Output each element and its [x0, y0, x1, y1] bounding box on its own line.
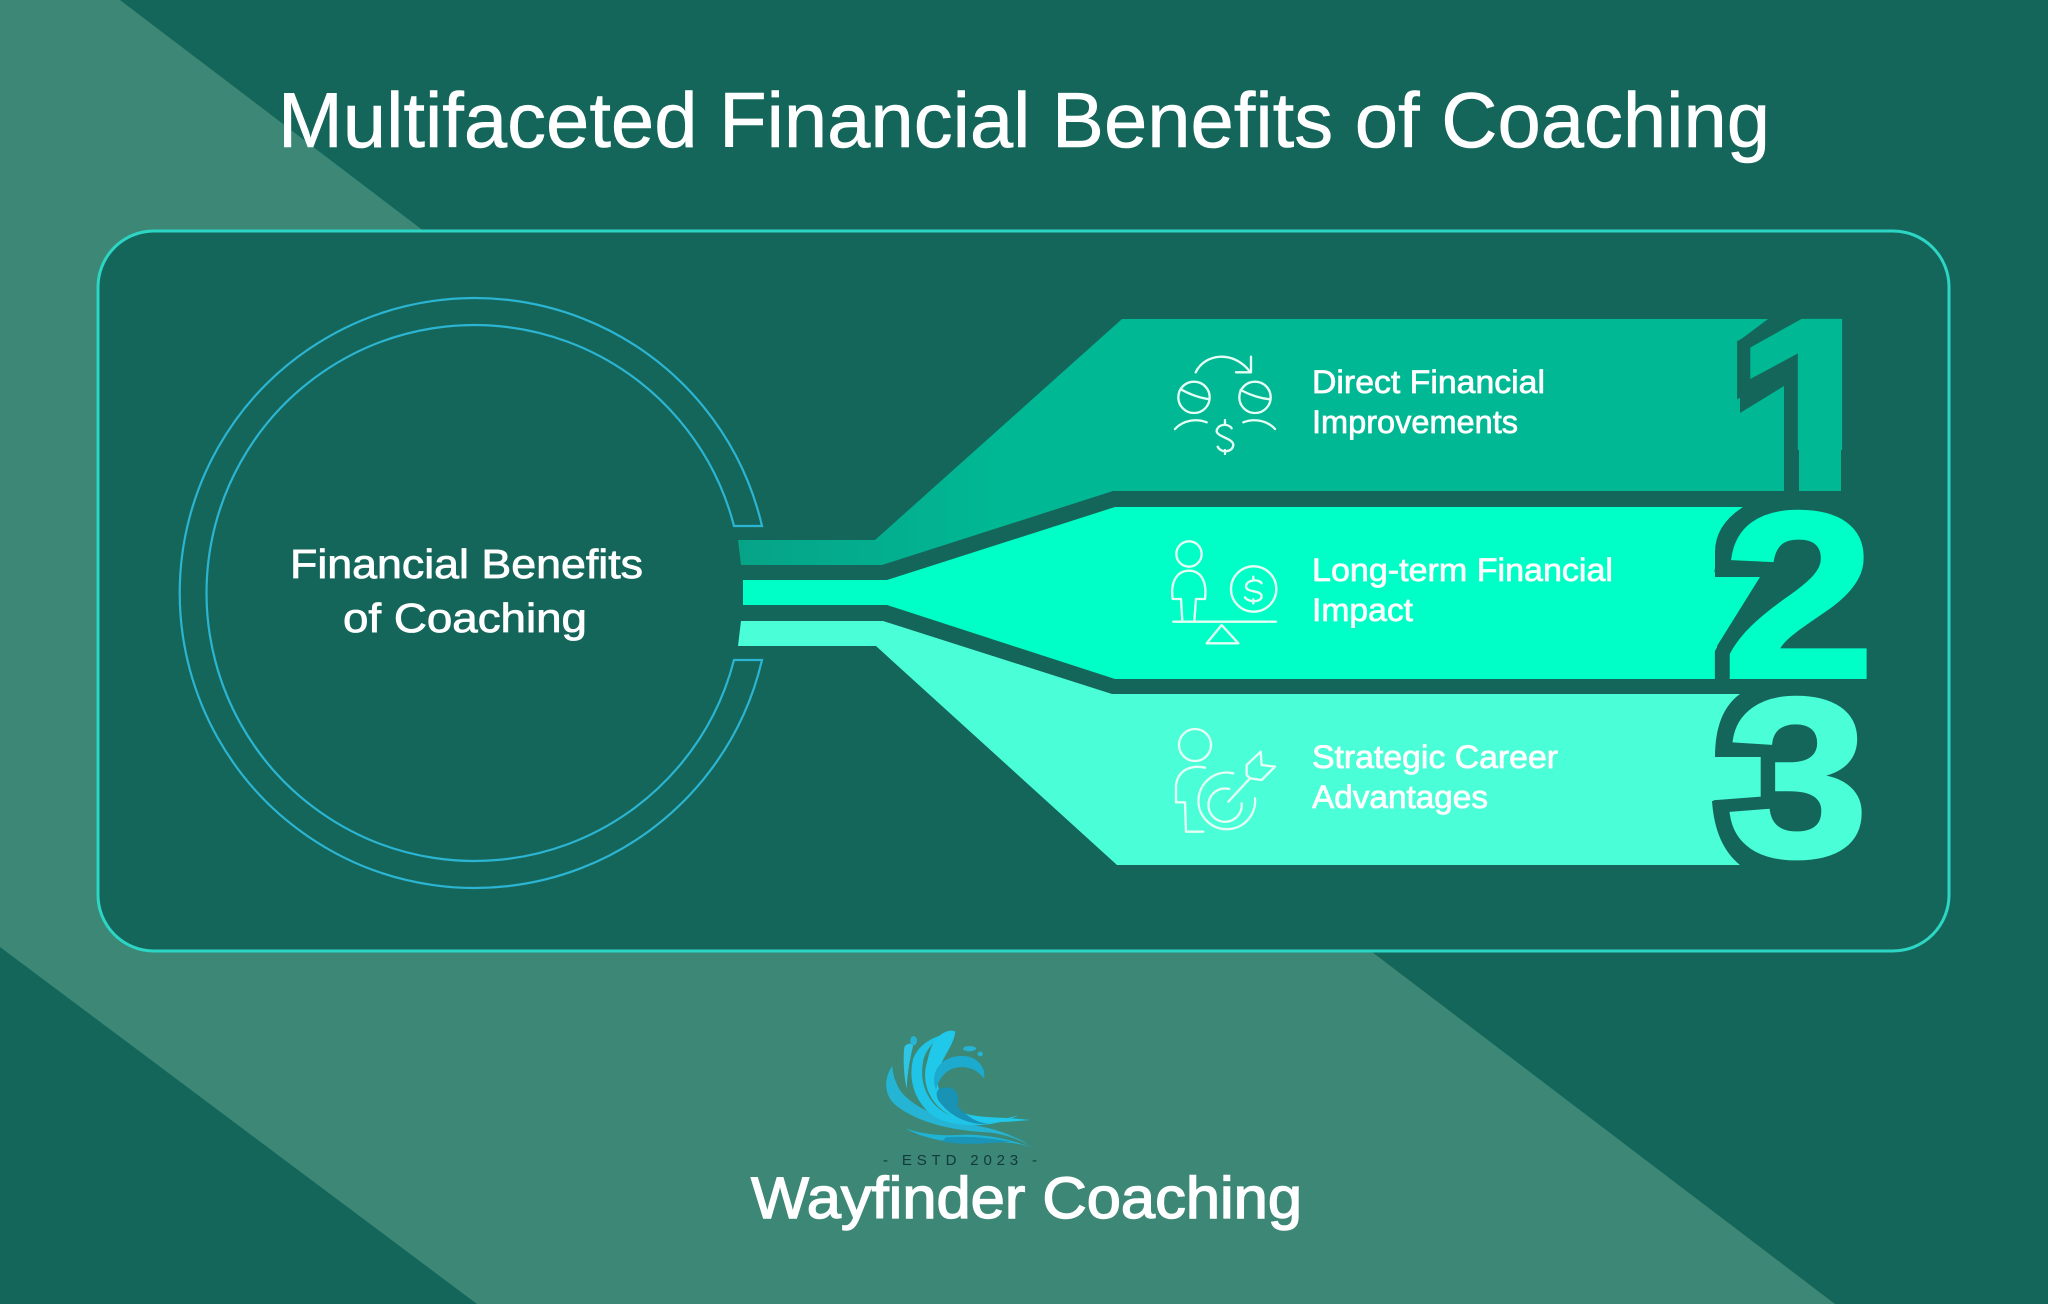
number 3: 3 — [1726, 652, 1869, 905]
label 3: Strategic Career — [1312, 739, 1558, 775]
label 2: Long-term Financial — [1312, 552, 1613, 588]
title: Multifaceted Financial Benefits of Coaching — [278, 76, 1770, 164]
circle label — [290, 541, 643, 641]
panel: main container — [98, 231, 1949, 951]
number 1 — [1737, 318, 1842, 491]
label 3 — [1312, 739, 1558, 815]
band 2: long-term financial impact — [743, 464, 1875, 728]
number 2: 2 — [1722, 464, 1875, 728]
number 1: 1 — [1733, 267, 1893, 544]
brand name: Wayfinder Coaching — [751, 1166, 1302, 1231]
circle ring — [180, 298, 762, 888]
band 3: strategic career advantages — [738, 621, 1869, 905]
label 1: Improvements — [1312, 404, 1518, 440]
icon: person with target — [1176, 729, 1275, 832]
label 2: Impact — [1312, 592, 1413, 628]
logo: wave — [886, 1031, 1035, 1149]
icon: people exchanging money — [1175, 357, 1275, 454]
label 2 — [1312, 552, 1613, 628]
band 1: direct financial improvements — [738, 318, 1842, 565]
label 3: Advantages — [1312, 779, 1488, 815]
number 1: 1 — [1733, 267, 1893, 544]
icon: person balancing money — [1172, 541, 1276, 643]
circle label: Financial Benefits — [290, 541, 643, 587]
circle label: of Coaching — [343, 595, 587, 641]
number 2: 2 — [1722, 464, 1875, 728]
label 1 — [1312, 364, 1545, 440]
label 1: Direct Financial — [1312, 364, 1545, 400]
number 3: 3 — [1726, 652, 1869, 905]
logo: established date: - ESTD 2023 - — [883, 1152, 1037, 1169]
